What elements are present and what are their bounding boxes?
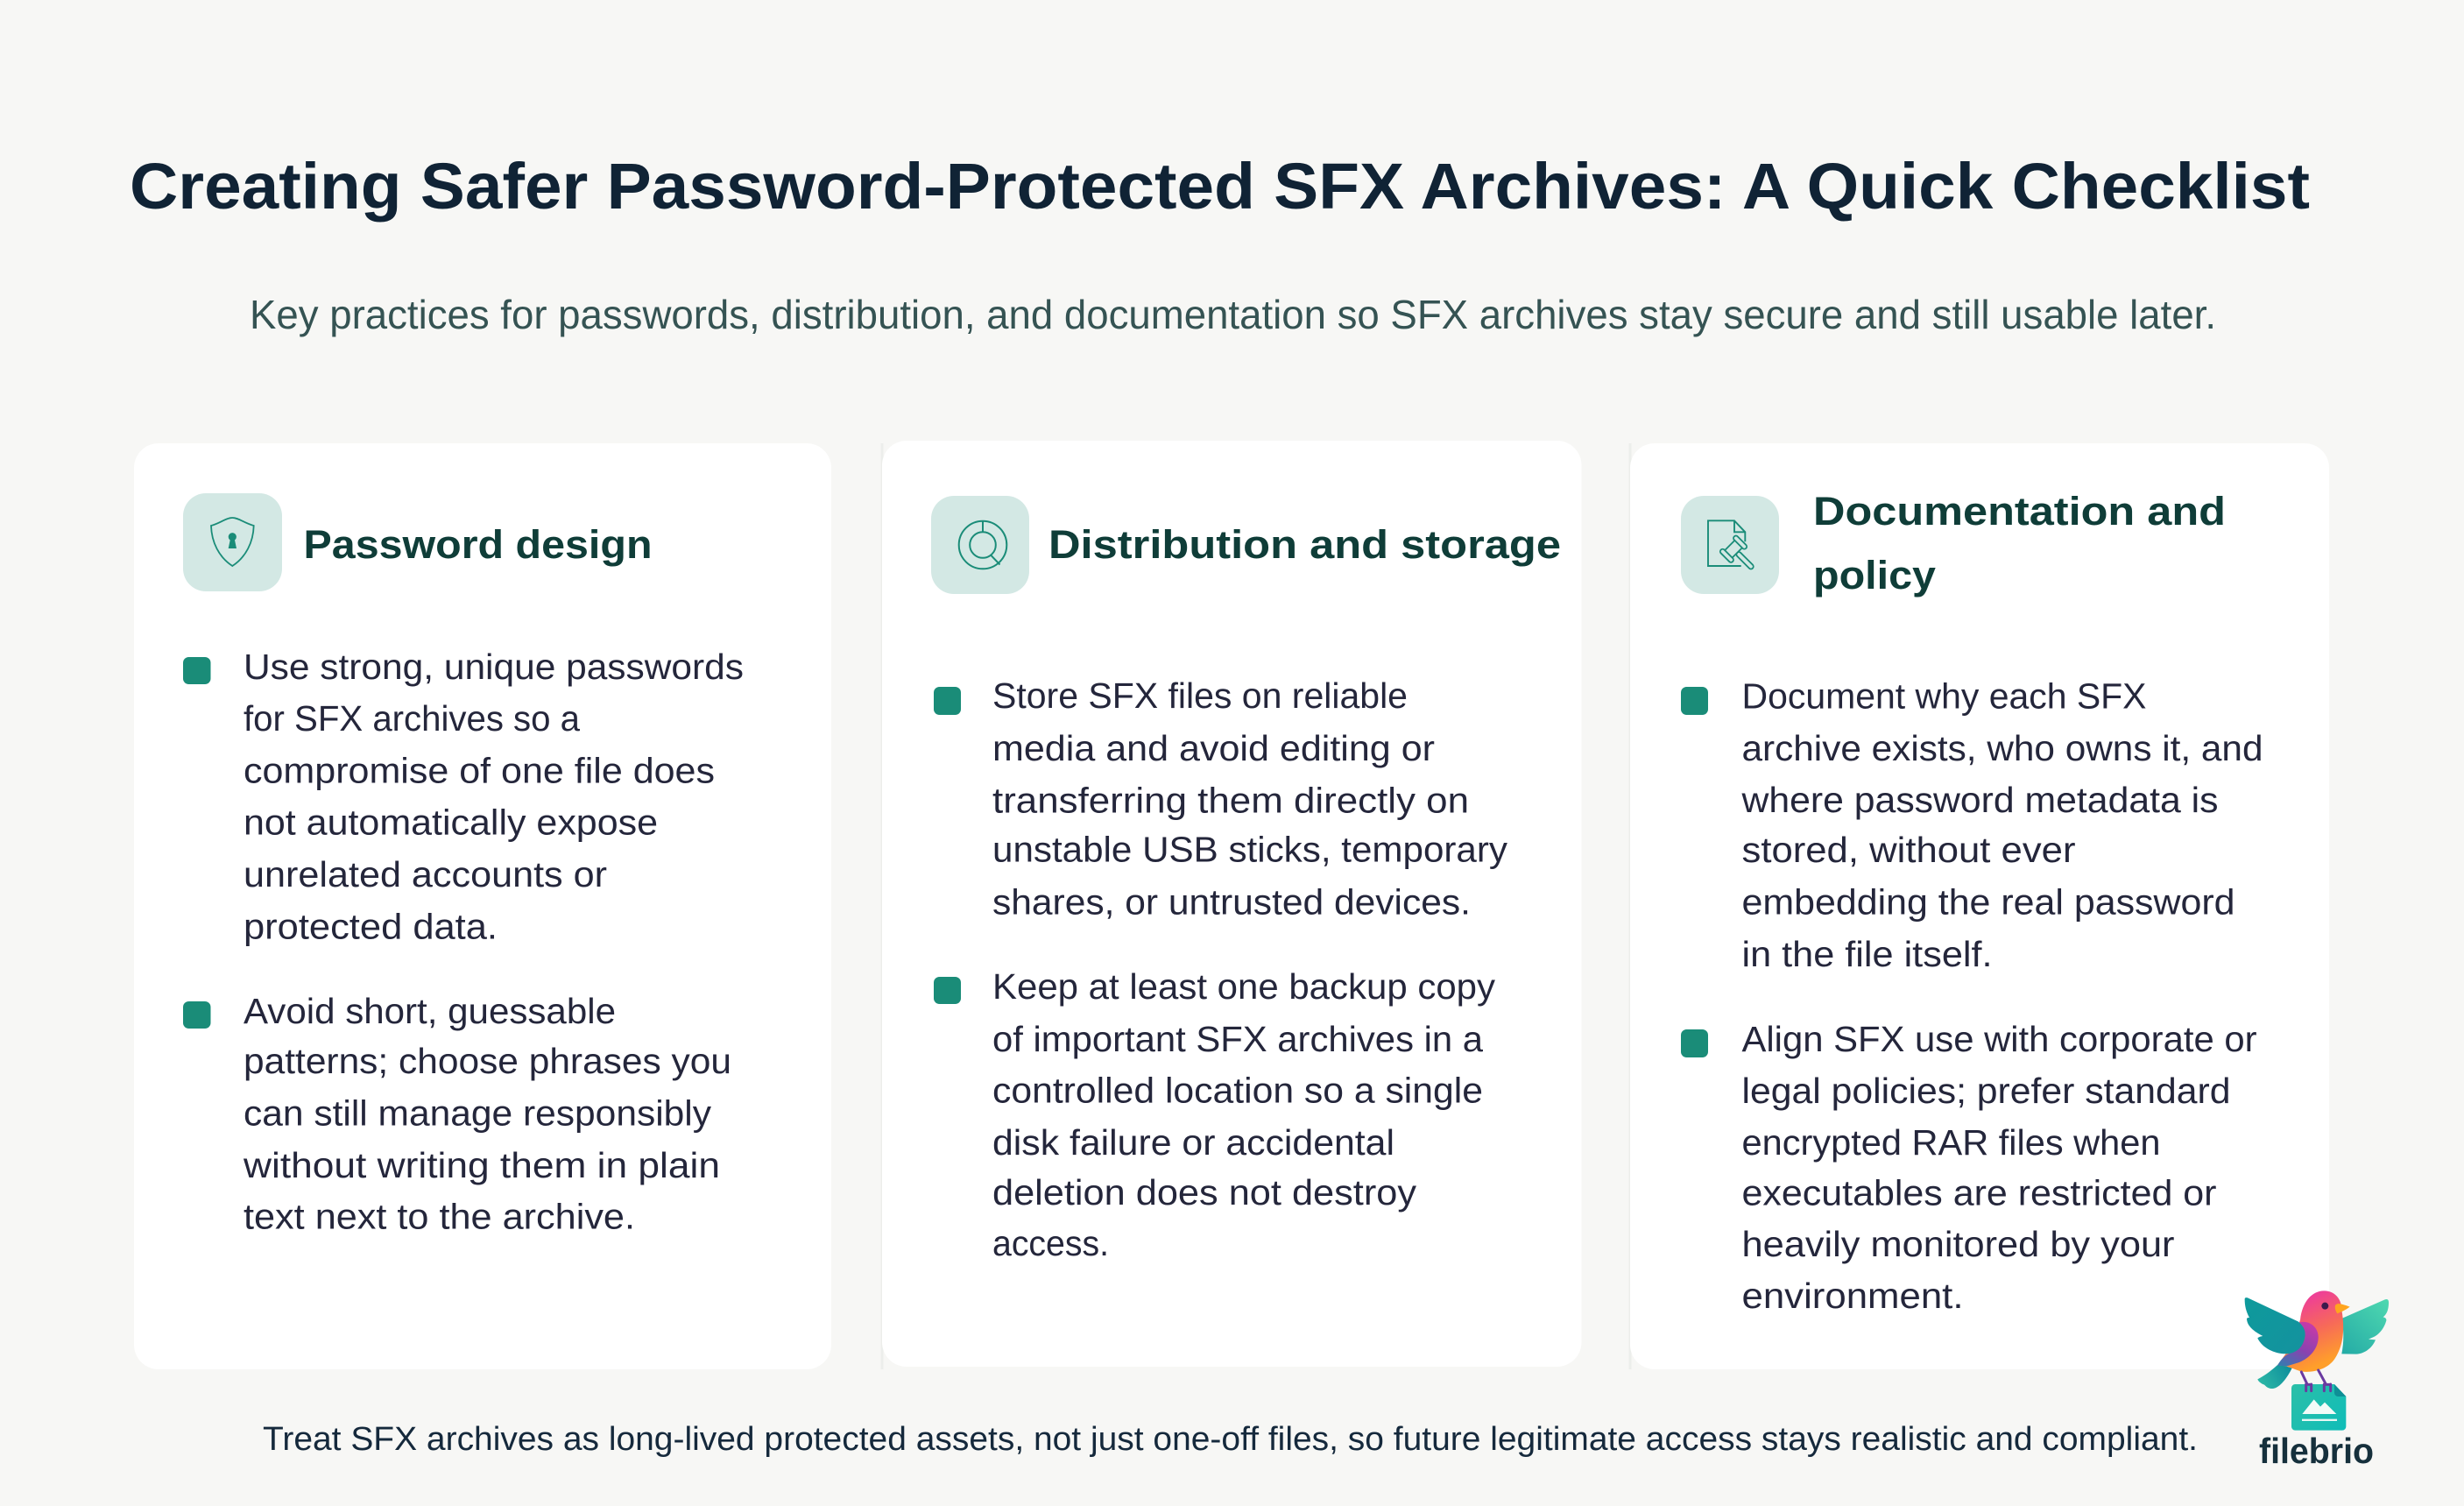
bullet text: reliable media: media and avoid editing or: [992, 728, 1435, 768]
bullet text: strong passwords: not automatically expose: [244, 802, 658, 843]
logo wordmark: filebrio: [2259, 1431, 2374, 1471]
bullet text: strong passwords: protected data.: [244, 906, 498, 946]
bullet text: avoid guessable patterns: without writing them in plain: [243, 1145, 720, 1185]
bullet text: reliable media: transferring them directly on: [992, 780, 1469, 820]
bullet marker: [1681, 1029, 1708, 1057]
bullet text: avoid guessable patterns: Avoid short, guessable: [244, 991, 616, 1031]
panel: password design: [134, 443, 831, 1369]
logo: filebrio: [2245, 1290, 2389, 1471]
bullet text: reliable media: Store SFX files on reliable: [992, 675, 1408, 716]
bullet text: reliable media: unstable USB sticks, temporary: [992, 829, 1507, 869]
icon: disk with magnifier: [931, 496, 1029, 594]
card background: [882, 441, 1582, 1367]
bullet text: align with policies: environment.: [1741, 1276, 1964, 1316]
bullet text: strong passwords: Use strong, unique passwords: [244, 647, 744, 687]
bullet text: document why: where password metadata is: [1740, 780, 2218, 820]
bullet text: align with policies: heavily monitored by your: [1741, 1224, 2174, 1264]
icon: bird on file: [2245, 1290, 2389, 1431]
subtitle: Key practices for passwords, distribution, and documentation so SFX archives stay secure and still usable later.: [250, 292, 2216, 337]
heading: [1813, 489, 2226, 597]
bullet text: document why: embedding the real password: [1741, 881, 2235, 922]
footer note: Treat SFX archives as long-lived protected assets, not just one-off files, so future legitimate access stays realistic and compliant.: [263, 1421, 2198, 1458]
bullet text: backup copy: disk failure or accidental: [992, 1122, 1394, 1163]
bullet text: document why: stored, without ever: [1741, 830, 2076, 870]
bullet text: reliable media: [992, 675, 1507, 922]
bullet marker: [934, 687, 961, 715]
bullet text: reliable media: shares, or untrusted devices.: [992, 881, 1471, 922]
bullet text: backup copy: deletion does not destroy: [992, 1172, 1417, 1213]
bullet text: strong passwords: compromise of one file does: [244, 750, 715, 790]
title: Creating Safer Password-Protected SFX Archives: A Quick Checklist: [130, 150, 2310, 223]
bullet text: align with policies: encrypted RAR files when: [1741, 1122, 2160, 1163]
bullet text: document why: in the file itself.: [1741, 934, 1992, 974]
bullet text: backup copy: Keep at least one backup copy: [992, 966, 1496, 1007]
bullet text: document why: [1740, 676, 2263, 974]
bullet text: align with policies: executables are restricted or: [1741, 1172, 2216, 1213]
bullet text: document why: Document why each SFX: [1741, 676, 2146, 717]
heading: Documentation and: [1813, 489, 2226, 534]
icon: shield with keyhole: [183, 493, 282, 591]
heading: Distribution and storage: [1048, 522, 1561, 567]
bullet text: strong passwords: [244, 647, 744, 946]
bullet text: avoid guessable patterns: text next to the archive.: [244, 1197, 635, 1237]
bullet marker: [183, 1001, 210, 1029]
icon: document with gavel: [1681, 496, 1779, 594]
bullet text: avoid guessable patterns: patterns; choose phrases you: [244, 1041, 731, 1081]
bullet text: backup copy: of important SFX archives in a: [992, 1019, 1483, 1059]
bullet text: avoid guessable patterns: can still manage responsibly: [244, 1093, 712, 1134]
bullet marker: [934, 977, 961, 1004]
bullet marker: [1681, 687, 1708, 715]
bullet text: backup copy: access.: [992, 1223, 1109, 1263]
bullet marker: [183, 657, 210, 684]
heading: Password design: [303, 522, 652, 567]
panel: documentation and policy: [1630, 443, 2329, 1369]
bullet text: document why: archive exists, who owns it, and: [1741, 728, 2263, 768]
card background: [1630, 443, 2329, 1369]
bullet text: align with policies: [1741, 1019, 2256, 1316]
card background: [134, 443, 831, 1369]
bullet text: avoid guessable patterns: [243, 991, 731, 1237]
bullet text: strong passwords: unrelated accounts or: [244, 854, 607, 894]
panel: distribution and storage: [882, 441, 1582, 1367]
bullet text: strong passwords: for SFX archives so a: [244, 698, 580, 739]
bullet text: backup copy: [992, 966, 1496, 1263]
bullet text: align with policies: legal policies; prefer standard: [1741, 1071, 2230, 1111]
heading: policy: [1813, 553, 1936, 597]
bullet text: align with policies: Align SFX use with corporate or: [1741, 1019, 2256, 1059]
bullet text: backup copy: controlled location so a single: [992, 1071, 1483, 1111]
